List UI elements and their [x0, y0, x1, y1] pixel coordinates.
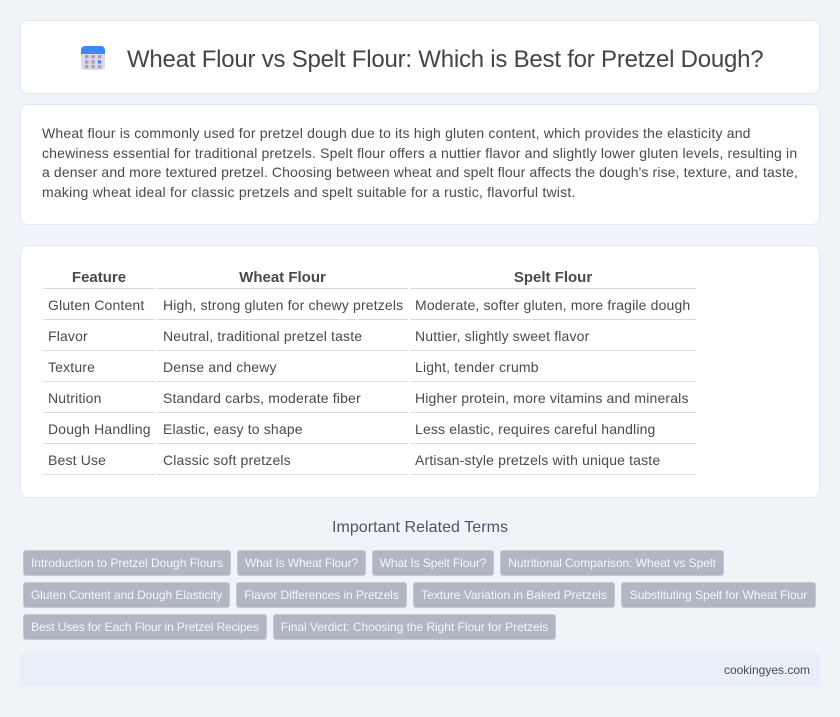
- row: Dough Handling: Dough Handling: [48, 421, 151, 437]
- footer: source: cookingyes.com: [724, 663, 810, 677]
- chip: [372, 550, 494, 576]
- chip: What Is Wheat Flour?: [245, 556, 358, 570]
- text block: introduction: chewiness essential for traditional pretzels. Spelt flour offers a nuttier flavor and slightly lower gluten levels, resulting in: [42, 144, 797, 160]
- comparison table: Neutral, traditional pretzel taste: [163, 328, 362, 344]
- chip: Best Uses for Each Flour in Pretzel Recipes: [31, 620, 259, 634]
- footer bar: [20, 653, 820, 686]
- text block: introduction: making wheat ideal for classic pretzels and spelt suitable for a rustic, flavorful twist.: [42, 184, 576, 200]
- chip: [413, 582, 615, 608]
- comparison table: Elastic, easy to shape: [163, 421, 303, 437]
- chip: [23, 582, 230, 608]
- text block: introduction: Wheat flour is commonly used for pretzel dough due to its high gluten content, which provides the elasticity and: [42, 125, 751, 141]
- row: Nutrition: Nutrition: [48, 390, 102, 406]
- text block: introduction: a denser and more textured pretzel. Choosing between wheat and spelt flour affects the dough's rise, texture, and taste,: [42, 164, 798, 180]
- row: Best Use: Best Use: [48, 452, 106, 468]
- comparison table: Moderate, softer gluten, more fragile dough: [415, 297, 690, 313]
- chip: What Is Spelt Flour?: [380, 556, 486, 570]
- chip: Final Verdict: Choosing the Right Flour for Pretzels: [281, 620, 548, 634]
- comparison table: Nuttier, slightly sweet flavor: [415, 328, 589, 344]
- panel: title card: [20, 20, 820, 94]
- comparison table: Less elastic, requires careful handling: [415, 421, 655, 437]
- chip: Nutritional Comparison: Wheat vs Spelt: [508, 556, 716, 570]
- comparison table: Artisan-style pretzels with unique taste: [415, 452, 660, 468]
- row: Texture: Texture: [48, 359, 95, 375]
- row: Gluten Content: Gluten Content: [48, 297, 144, 313]
- chip: Flavor Differences in Pretzels: [244, 588, 399, 602]
- title: Wheat Flour vs Spelt Flour: Which is Best for Pretzel Dough?: [127, 46, 763, 73]
- comparison table: Classic soft pretzels: [163, 452, 291, 468]
- chip: [237, 550, 366, 576]
- comparison table: Dense and chewy: [163, 359, 277, 375]
- icon: calendar: [81, 46, 105, 70]
- text block: introduction: [42, 125, 798, 200]
- chip: Substituting Spelt for Wheat Flour: [630, 588, 807, 602]
- chip: [621, 582, 816, 608]
- heading: Important Related Terms: Important Related Terms: [332, 519, 508, 536]
- panel: comparison table: [20, 245, 820, 498]
- header: Spelt Flour: Spelt Flour: [514, 269, 592, 286]
- comparison table: [43, 269, 696, 475]
- chip: Texture Variation in Baked Pretzels: [421, 588, 607, 602]
- comparison table: Higher protein, more vitamins and minerals: [415, 390, 689, 406]
- chip: [500, 550, 724, 576]
- comparison table: High, strong gluten for chewy pretzels: [163, 297, 403, 313]
- chip: Gluten Content and Dough Elasticity: [31, 588, 222, 602]
- chip: [273, 614, 556, 640]
- related terms chips: [23, 550, 816, 640]
- chip: [23, 550, 231, 576]
- comparison table: Standard carbs, moderate fiber: [163, 390, 361, 406]
- panel: introduction: [20, 104, 820, 225]
- row: Flavor: Flavor: [48, 328, 88, 344]
- chip: [23, 614, 267, 640]
- header: Wheat Flour: Wheat Flour: [239, 269, 326, 286]
- chip: [236, 582, 407, 608]
- comparison table: Light, tender crumb: [415, 359, 539, 375]
- chip: Introduction to Pretzel Dough Flours: [31, 556, 223, 570]
- header: Feature: Feature: [72, 269, 126, 286]
